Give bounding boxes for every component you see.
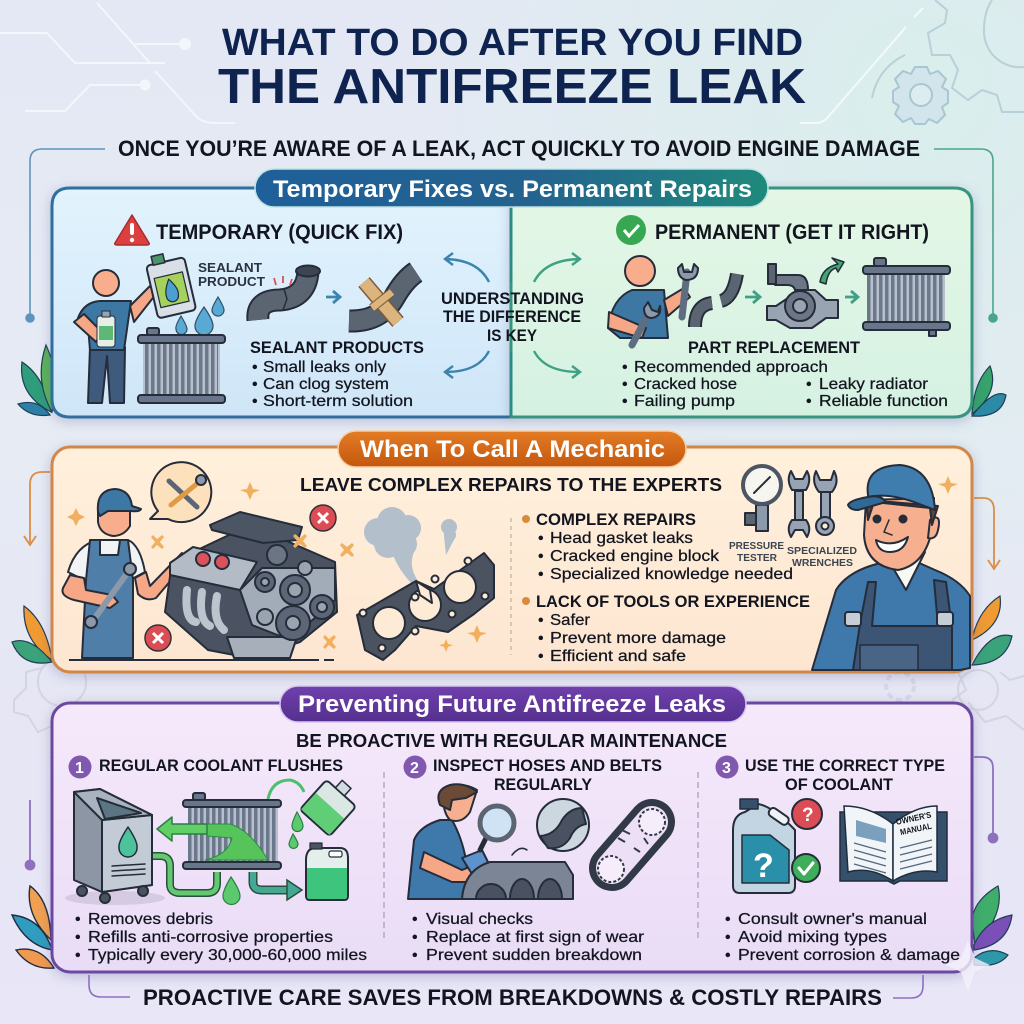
icon: cracked hose (258, 266, 320, 320)
text: complex repairs: • (538, 548, 544, 565)
text: lack of tools or experience: Efficient and safe (550, 648, 686, 665)
section heading pill: When To Call A Mechanic (360, 436, 665, 463)
icon: coolant jug with question mark (733, 799, 822, 893)
section heading pill (255, 169, 768, 207)
list: inspection bullets: Prevent sudden breakdown (426, 947, 642, 964)
text: part replacement: Leaky radiator (819, 376, 929, 393)
text: sealant products: SEALANT PRODUCTS (250, 338, 424, 357)
list: coolant type bullets: • (725, 911, 731, 928)
list: flush bullets: Removes debris (88, 911, 213, 928)
connector: mechanic panel left arrow (24, 472, 50, 545)
text: sealant products: Can clog system (263, 376, 389, 393)
pipe: radiator to bottle (253, 872, 302, 900)
divider (510, 518, 512, 655)
panel: temporary vs permanent (52, 169, 972, 417)
step 3 heading (716, 756, 945, 794)
panel background (52, 703, 972, 972)
icon: flush machine (65, 789, 165, 905)
connector: prevention panel left (26, 800, 34, 870)
panel background: permanent (511, 188, 972, 417)
connector: prevention panel right (974, 757, 998, 842)
text: complex repairs: • (538, 566, 544, 583)
text: lack of tools or experience: LACK OF TOOLS OR EXPERIENCE (536, 592, 810, 611)
text: sealant products: Short-term solution (263, 393, 413, 410)
icon: sealant jug (144, 249, 196, 319)
title: THE ANTIFREEZE LEAK (218, 60, 806, 114)
text: complex repairs: COMPLEX REPAIRS (536, 510, 696, 529)
list: coolant type bullets: Avoid mixing types (738, 929, 887, 946)
leaves: panel 2 right (972, 596, 1012, 665)
label: pressure tester: TESTER (737, 552, 777, 564)
list: inspection bullets: Visual checks (426, 911, 533, 928)
step 1 heading (68, 756, 343, 778)
list: inspection bullets: • (412, 929, 418, 946)
step 2 heading: 2 (410, 760, 419, 777)
icon: radiator (138, 328, 225, 403)
icon: coolant bottle (306, 843, 348, 900)
text: part replacement (622, 338, 948, 410)
label: pressure tester (729, 540, 784, 564)
text: part replacement: Recommended approach (634, 359, 828, 376)
list: flush bullets: • (75, 929, 81, 946)
text: sealant products (250, 338, 424, 410)
text: lack of tools or experience: • (538, 630, 544, 647)
icon: inspecting person (408, 784, 514, 899)
label: specialized wrenches: WRENCHES (792, 557, 853, 569)
arrows: temporary side (445, 253, 489, 378)
icon: worn belt (598, 809, 665, 882)
section heading pill (338, 431, 686, 467)
text: complex repairs: Head gasket leaks (550, 530, 693, 547)
section heading pill: Temporary Fixes vs. Permanent Repairs (273, 176, 752, 203)
step 3 heading: OF COOLANT (785, 776, 893, 794)
text: sealant products: • (252, 376, 258, 393)
connector: mechanic panel right arrow (974, 498, 1000, 569)
text: part replacement: • (806, 376, 812, 393)
connector: subtitle right (934, 149, 997, 322)
list: coolant type bullets: Prevent corrosion & damage (738, 947, 960, 964)
label: owner's manual: OWNER'S (895, 809, 932, 827)
icon: owner's manual book (840, 806, 947, 884)
text: lack of tools or experience: • (538, 648, 544, 665)
icon: green drops (223, 812, 303, 904)
label: sealant product: SEALANT (198, 260, 262, 275)
footer statement: PROACTIVE CARE SAVES FROM BREAKDOWNS & COSTLY REPAIRS (143, 985, 882, 1010)
list: coolant type bullets (725, 911, 960, 964)
icon: warning triangle (115, 215, 149, 245)
arrow: hose to pump (745, 291, 760, 303)
list: coolant type bullets: • (725, 947, 731, 964)
text: lack of tools or experience: Prevent more damage (550, 630, 726, 647)
label: pressure tester: PRESSURE (729, 540, 784, 552)
text: part replacement: Failing pump (634, 393, 735, 410)
step 1 heading: 1 (75, 760, 84, 777)
arrow: pump to radiator (845, 291, 858, 303)
icon: red x badges (145, 505, 336, 651)
label: owner's manual: MANUAL (899, 821, 933, 837)
arrow: flow to machine (157, 817, 207, 841)
icon: person pouring sealant (74, 270, 156, 403)
icon: flushing radiator (183, 793, 281, 869)
text: sealant products: • (252, 359, 258, 376)
decorative circuit traces and gears (0, 0, 1024, 758)
arrows: permanent side (534, 253, 580, 378)
list: inspection bullets: Replace at first sign of wear (426, 929, 645, 946)
subheading: be proactive: BE PROACTIVE WITH REGULAR MAINTENANCE (296, 731, 727, 751)
icon: coolant jug with question mark: ? (753, 847, 774, 885)
panel background (52, 447, 972, 672)
icon: check badge (616, 215, 646, 245)
label: specialized wrenches: SPECIALIZED (787, 545, 857, 557)
icon: smoke (364, 507, 457, 586)
connectors: footer (89, 975, 923, 998)
text: part replacement: PART REPLACEMENT (688, 338, 861, 357)
icon: person with wrenches (608, 256, 698, 345)
text: complex repairs (522, 510, 793, 583)
text: complex repairs: Specialized knowledge needed (550, 566, 793, 583)
decorative sparkles and marks (67, 476, 958, 652)
list: coolant type bullets: • (725, 929, 731, 946)
text: complex repairs: Cracked engine block (550, 548, 720, 565)
icon: mechanic with wrench (62, 489, 188, 658)
icon: new radiator (863, 258, 950, 336)
step 3 heading: 3 (722, 760, 731, 777)
pipe: machine to radiator (153, 856, 217, 893)
leaves: panel 3 right (972, 886, 1012, 966)
text: lack of tools or experience: Safer (550, 612, 591, 629)
leaves: panel 3 left (12, 886, 54, 968)
text: sealant products: • (252, 393, 258, 410)
subtitle: ONCE YOU’RE AWARE OF A LEAK, ACT QUICKLY TO AVOID ENGINE DAMAGE (118, 136, 920, 161)
section heading pill (280, 686, 746, 722)
list: flush bullets: Typically every 30,000-60,000 miles (88, 947, 367, 964)
list: coolant type bullets: Consult owner's manual (738, 911, 927, 928)
icon: taped hose (349, 272, 416, 322)
arrow: hose to repaired hose (326, 291, 340, 303)
subheading: leave complex repairs: LEAVE COMPLEX REPAIRS TO THE EXPERTS (300, 474, 722, 495)
leaves: panel 1 left (18, 345, 55, 416)
text: complex repairs: • (538, 530, 544, 547)
title (218, 22, 806, 114)
floor line (69, 659, 334, 661)
text: part replacement: • (622, 359, 628, 376)
text: understanding the difference: IS KEY (487, 327, 537, 345)
list: inspection bullets (412, 911, 645, 964)
step 3 heading: USE THE CORRECT TYPE (745, 757, 945, 775)
icon: specialized wrenches (789, 471, 837, 537)
icon: sealant drops (176, 297, 224, 335)
label: owner's manual (895, 809, 935, 838)
text: understanding the difference: THE DIFFERENCE (443, 308, 581, 326)
text: part replacement: Reliable function (819, 393, 948, 410)
panel background: temporary (52, 188, 511, 417)
label: sealant product: PRODUCT (198, 274, 265, 289)
text: sealant products: Small leaks only (263, 359, 386, 376)
column dividers (384, 772, 698, 940)
label: sealant product (198, 260, 265, 289)
list: inspection bullets: • (412, 911, 418, 928)
leaves: panel 2 left (12, 606, 52, 663)
list: flush bullets: • (75, 911, 81, 928)
list: flush bullets (75, 911, 367, 964)
connector: subtitle left (26, 149, 105, 322)
heading: temporary: TEMPORARY (QUICK FIX) (156, 221, 403, 244)
step 2 heading: INSPECT HOSES AND BELTS (433, 757, 662, 775)
icon: speech bubble with tools (150, 462, 211, 522)
icon: engine (165, 512, 337, 658)
divider (510, 207, 512, 417)
list: inspection bullets: • (412, 947, 418, 964)
arc: jug to radiator (268, 780, 304, 799)
icon: tilted coolant jug (300, 772, 363, 836)
text: part replacement: Cracked hose (634, 376, 737, 393)
icon: replacement hoses (695, 274, 737, 327)
leaves: panel 1 right (972, 366, 1006, 416)
icon: coolant jug with question mark: ? (802, 805, 814, 826)
icon: smiling mechanic (812, 465, 970, 670)
text: understanding the difference: UNDERSTANDING (441, 290, 584, 308)
list: flush bullets: • (75, 947, 81, 964)
section heading pill: Preventing Future Antifreeze Leaks (298, 691, 726, 718)
text: part replacement: • (806, 393, 812, 410)
step 2 heading (404, 756, 662, 794)
heading: permanent: PERMANENT (GET IT RIGHT) (655, 221, 929, 244)
decorative sparkle: bottom right (946, 940, 990, 992)
title: WHAT TO DO AFTER YOU FIND (222, 22, 803, 64)
text: part replacement: • (622, 393, 628, 410)
icon: water pump (767, 258, 844, 328)
panel: when to call a mechanic (52, 431, 972, 672)
icon: engine being inspected (462, 799, 589, 899)
list: flush bullets: Refills anti-corrosive properties (88, 929, 333, 946)
text: part replacement: • (622, 376, 628, 393)
icon: pressure tester (743, 466, 781, 531)
step 1 heading: REGULAR COOLANT FLUSHES (99, 757, 343, 775)
step 2 heading: REGULARLY (494, 776, 592, 794)
panel: preventing future leaks (52, 686, 972, 972)
text: understanding the difference (441, 290, 584, 345)
label: specialized wrenches (787, 545, 857, 569)
icon: cracked head gasket (357, 553, 494, 660)
text: lack of tools or experience: • (538, 612, 544, 629)
text: lack of tools or experience (522, 592, 810, 665)
